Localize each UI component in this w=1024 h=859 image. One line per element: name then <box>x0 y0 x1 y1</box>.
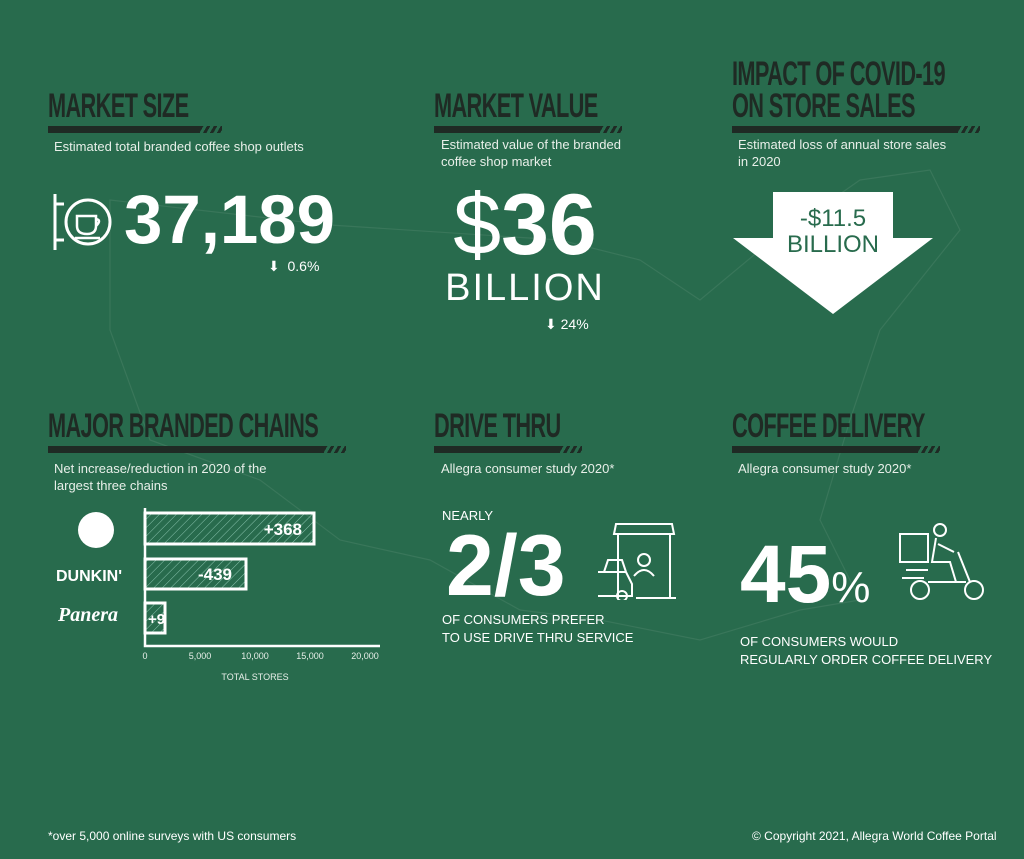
copyright: © Copyright 2021, Allegra World Coffee Portal <box>752 829 997 843</box>
stat: 45% <box>740 529 992 667</box>
text: delivery subtitle: Allegra consumer study 2020* <box>738 461 911 476</box>
stat: 2/3: NEARLY <box>442 508 493 523</box>
text: covid subtitle: Estimated loss of annual store sales <box>738 137 946 152</box>
bar chart: 15,000 <box>296 651 324 661</box>
stat: 2/3: TO USE DRIVE THRU SERVICE <box>442 630 633 645</box>
text: market value subtitle: Estimated value of the branded <box>441 137 621 152</box>
text: covid subtitle <box>738 137 946 169</box>
icon: scooter delivery <box>899 523 984 600</box>
stat: 2/3: 2/3 <box>446 518 566 614</box>
change: down 24%: ⬇ 24% <box>545 316 589 332</box>
icon: coffee sign <box>54 194 112 250</box>
arrow: -$11.5 billion <box>733 192 933 314</box>
number: $36 billion: $36 <box>453 177 597 273</box>
heading: market value: MARKET VALUE <box>434 87 598 125</box>
text: drive thru subtitle: Allegra consumer study 2020* <box>441 461 614 476</box>
bar chart: +9 <box>148 611 165 628</box>
stat: 2/3: OF CONSUMERS PREFER <box>442 612 605 627</box>
text: market size subtitle: Estimated total branded coffee shop outlets <box>54 139 304 154</box>
heading: impact of covid: IMPACT OF COVID-19 <box>732 55 945 93</box>
logos: DUNKIN' <box>56 568 122 585</box>
bar chart: 5,000 <box>189 651 211 661</box>
heading: coffee delivery: COFFEE DELIVERY <box>732 407 925 445</box>
heading: market size: MARKET SIZE <box>48 87 188 125</box>
text: REGULARLY ORDER COFFEE DELIVERY <box>740 652 992 667</box>
stat: 2/3 <box>442 508 633 645</box>
logos <box>56 512 122 626</box>
heading: major branded chains: MAJOR BRANDED CHAINS <box>48 407 318 445</box>
number: $36 billion <box>445 177 605 309</box>
bar chart <box>142 508 380 682</box>
heading: drive thru: DRIVE THRU <box>434 407 561 445</box>
bar chart: 20,000 <box>351 651 379 661</box>
bar chart: 10,000 <box>241 651 269 661</box>
arrow: -$11.5 billion: BILLION <box>787 231 879 258</box>
bar chart: 0 <box>142 651 148 661</box>
arrow: -$11.5 billion: -$11.5 <box>800 205 866 232</box>
stat: 45%: 45% <box>740 529 870 620</box>
text: chains subtitle <box>54 461 266 493</box>
bar chart: +368 <box>264 520 302 539</box>
bar chart: TOTAL STORES <box>221 672 289 682</box>
text: chains subtitle: Net increase/reduction in 2020 of the <box>54 461 266 476</box>
heading: impact of covid <box>732 55 945 125</box>
text: covid subtitle: in 2020 <box>738 154 781 169</box>
icon: drive thru <box>598 523 676 600</box>
stat: 45%: OF CONSUMERS WOULD <box>740 634 898 649</box>
change: down 0.6%: ⬇ 0.6% <box>268 258 319 274</box>
text: market value subtitle: coffee shop market <box>441 154 551 169</box>
text: market value subtitle <box>441 137 621 169</box>
footnote: *over 5,000 online surveys with US consumers <box>48 829 296 843</box>
logos: Panera <box>58 604 118 626</box>
text: chains subtitle: largest three chains <box>54 478 167 493</box>
heading: impact of covid: ON STORE SALES <box>732 87 915 125</box>
number: $36 billion: BILLION <box>445 267 605 309</box>
bar chart: -439 <box>198 565 232 584</box>
number: 37,189: 37,189 <box>124 181 335 258</box>
